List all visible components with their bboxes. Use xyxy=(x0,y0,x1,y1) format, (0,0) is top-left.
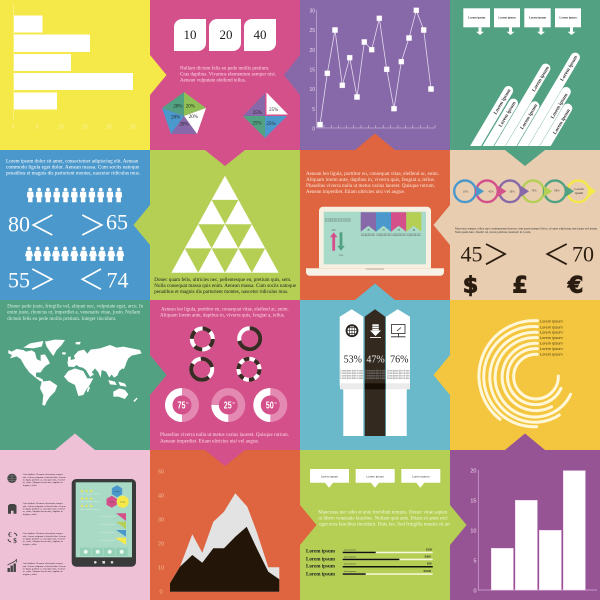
circle labels: 45% xyxy=(488,190,494,193)
circle labels: 70% xyxy=(531,190,537,192)
pyramid xyxy=(171,176,279,273)
screen tabs: 46 xyxy=(367,230,369,232)
screen text lines: Lorem ipsum dolor xyxy=(100,540,115,542)
tab bar xyxy=(80,548,128,556)
small text blocks: Lorem ipsum dolor sit amet xyxy=(366,374,385,378)
pentagon pie: 20% xyxy=(179,123,189,128)
star ratings: ★ xyxy=(89,496,94,501)
arc labels: Lorem ipsum xyxy=(540,352,563,357)
axis labels: 0 xyxy=(12,125,15,131)
row labels: Lorem ipsum xyxy=(306,557,336,562)
circle labels: Lorem xyxy=(574,187,584,191)
caption: dictum felis eu pede mollis pretium. Integer tincidunt. xyxy=(7,317,116,322)
columns xyxy=(491,471,585,590)
axis labels: 25 xyxy=(130,125,136,131)
percent values: 47% xyxy=(366,354,385,365)
row labels: Lorem ipsum xyxy=(306,572,336,577)
screen text lines: Lorem ipsum dolor sit xyxy=(80,501,101,503)
caption xyxy=(154,278,297,295)
arc labels: Lorem ipsum xyxy=(540,335,563,340)
panel: pink donut charts xyxy=(150,300,300,450)
large donut 25: 25 xyxy=(224,401,232,412)
comparison 80 vs 65: 80 xyxy=(8,212,30,237)
pink text block: Aenean vulputate eleifend tellus. xyxy=(180,79,246,84)
y axis labels xyxy=(309,8,315,132)
panel: purple column chart xyxy=(450,450,600,600)
hexagons: Lorem xyxy=(120,501,126,503)
large donut 75: 75 xyxy=(178,401,186,412)
caption: Donec quam felis, ultricies nec, pellentesque eu, pretium quis, sem. xyxy=(154,278,291,283)
circle chain xyxy=(454,180,596,202)
screen tabs: Lorem ipsum dolor sit amet xyxy=(406,235,421,237)
caption xyxy=(7,305,144,322)
arrow: pink down into orange xyxy=(205,450,245,466)
star ratings: ★ xyxy=(85,496,90,501)
side text blocks: ac, enim. Aliquam lorem ante, dapibus in xyxy=(23,570,64,573)
circle labels: 10% xyxy=(463,190,469,193)
side text blocks: nisi. Aenean vulputate eleifend tellus. Aenean xyxy=(23,535,66,538)
panel: cyan arrow columns xyxy=(300,300,450,450)
screen tabs: Lorem ipsum dolor sit amet xyxy=(361,235,375,237)
star ratings: ★ xyxy=(80,504,85,509)
intro text: penatibus et magnis dis parturient montes, nascetur ridiculus mus. xyxy=(6,172,140,177)
callout boxes xyxy=(463,8,581,35)
dark area xyxy=(170,527,279,592)
screen tabs: Lorem ipsum dolor sit amet xyxy=(376,233,391,235)
hexagons: Lorem xyxy=(109,501,115,503)
currency symbols: € xyxy=(567,274,583,298)
axis labels: 5 xyxy=(36,125,39,131)
y axis labels: 5 xyxy=(312,107,315,113)
tile numbers: 10 xyxy=(184,27,196,42)
caption: Aenean leo ligula, porttitor eu, consequat vitae, eleifend ac, enim. xyxy=(306,172,439,177)
y axis labels: 30 xyxy=(158,518,164,524)
progress small labels: Lorem ipsum xyxy=(344,548,356,551)
y axis labels: 0 xyxy=(473,588,476,594)
world map xyxy=(8,340,142,406)
segmented donut two xyxy=(239,328,260,349)
screen text lines: Lorem ipsum dolor sit xyxy=(80,509,101,511)
screen heading: Lorem ipsum dolor sit amet consectetuer xyxy=(325,220,351,222)
arrow: yellow to pink xyxy=(150,55,166,95)
y axis labels: 20 xyxy=(158,542,164,548)
pink text block: Nullam dictum felis eu pede mollis pretium. xyxy=(180,67,269,72)
diamond pie: 25% xyxy=(252,122,262,127)
pentagon pie: 20% xyxy=(189,115,198,120)
progress bars xyxy=(343,552,433,575)
y axis labels: 15 xyxy=(470,498,476,504)
circle labels: 30% xyxy=(509,190,515,193)
caption xyxy=(306,172,439,195)
screen text lines: Lorem ipsum dolor xyxy=(100,532,115,534)
icon: growth chart xyxy=(8,560,17,572)
caption: penatibus et magnis dis parturient montes, nascetur ridiculus mus. xyxy=(154,290,288,295)
star ratings: ★ xyxy=(80,496,85,501)
currency symbols: $ xyxy=(463,274,478,298)
pentagon pie: 20% xyxy=(171,116,180,121)
diagonal bars xyxy=(472,57,575,152)
progress small labels: Lorem ipsum xyxy=(344,563,356,566)
y axis labels: 10 xyxy=(309,87,315,93)
axis labels xyxy=(12,125,136,131)
diamond pie: 25% xyxy=(253,111,262,116)
bubble labels xyxy=(321,474,430,478)
pink text block xyxy=(180,67,276,84)
percent values: 53% xyxy=(344,354,362,365)
callout labels xyxy=(468,16,577,20)
bottom caption: Aenean imperdiet. Etiam ultricies nisi vel augue. xyxy=(160,439,259,444)
bar labels: Lorem ipsum xyxy=(494,88,513,116)
row labels: Lorem ipsum xyxy=(306,549,336,554)
circle labels: 80% xyxy=(554,190,560,192)
screen tabs: Lorem ipsum dolor sit amet xyxy=(376,235,391,237)
arc labels: Lorem ipsum xyxy=(540,319,563,324)
people row one xyxy=(27,188,122,202)
large donut 25 xyxy=(211,388,245,422)
y axis labels: 0 xyxy=(159,590,163,596)
side text blocks: feugiat a, tellus xyxy=(23,573,37,576)
y axis labels: 25 xyxy=(309,28,315,34)
pentagon pie xyxy=(162,92,206,134)
screen tabs: Lorem ipsum dolor sit amet xyxy=(392,233,406,235)
side text blocks: Cras dapibus. Vivamus elementum semper xyxy=(23,473,63,476)
comparison 80 vs 65: 65 xyxy=(106,209,128,234)
arc labels: Lorem ipsum xyxy=(540,341,563,346)
small text blocks: Lorem ipsum dolor sit amet xyxy=(387,377,410,380)
side text blocks: nisi. Aenean vulputate eleifend tellus. Aenean xyxy=(23,505,66,508)
axis labels: 20 xyxy=(106,125,112,131)
screen text lines: Lorem ipsum dolor xyxy=(100,524,115,526)
side text blocks: Cras dapibus. Vivamus elementum semper xyxy=(23,562,63,565)
arrow: purple to pink xyxy=(284,55,300,95)
up and down arrows xyxy=(330,228,345,257)
row labels: Lorem ipsum xyxy=(306,564,336,569)
comparison 55 vs 74 xyxy=(8,267,128,292)
star ratings xyxy=(80,488,94,509)
arrow: purple up xyxy=(505,434,545,450)
people row two xyxy=(25,247,124,261)
callout labels: Lorem ipsum xyxy=(498,16,516,20)
star ratings: ★ xyxy=(80,488,85,493)
arrow: orange up xyxy=(355,134,395,150)
screen tabs: 50 xyxy=(398,230,400,232)
bubble labels: Lorem ipsum xyxy=(321,474,339,478)
grey area xyxy=(170,493,279,592)
segmented donut one xyxy=(192,328,213,350)
pentagon pie: 20% xyxy=(186,105,195,110)
large donut 50 xyxy=(253,388,287,422)
small text blocks: Lorem ipsum dolor sit amet xyxy=(366,372,385,375)
side text blocks xyxy=(23,473,66,576)
currency symbols: £ xyxy=(512,274,528,298)
arrow: cyan up xyxy=(355,284,395,300)
white column right xyxy=(386,309,410,436)
small text blocks: Lorem ipsum dolor sit amet xyxy=(387,372,410,375)
small text xyxy=(455,228,598,234)
bar labels: Lorem ipsum xyxy=(551,92,570,120)
bottom caption xyxy=(160,433,289,444)
icon: globe xyxy=(346,325,358,336)
side text blocks: leo ligula, porttitor eu, consequat vitae, eleifend xyxy=(23,538,65,540)
panel: purple line chart xyxy=(300,0,450,150)
screen tabs xyxy=(361,212,421,237)
progress small labels: $5430 xyxy=(424,569,432,573)
bottom caption: Phasellus viverra nulla ut metus varius laoreet. Quisque rutrum. xyxy=(160,433,289,438)
side text blocks: leo ligula, porttitor eu, consequat vitae, eleifend xyxy=(23,508,65,510)
intro text xyxy=(6,160,140,177)
bar labels: Lorem ipsum xyxy=(499,100,518,128)
side text blocks: leo ligula, porttitor eu, consequat vitae, eleifend xyxy=(23,568,65,570)
screen heading: Lorem ipsum dolor sit amet consectetuer xyxy=(325,219,351,221)
pink text block: Cras dapibus. Vivamus elementum semper nisi. xyxy=(180,73,276,78)
small text: Maecenas tempus, tellus eget condimentum rhoncus, sem quam semper libero, sit amet adipiscing sem neque sed ipsum. xyxy=(455,228,598,230)
large donut 75: % xyxy=(186,401,189,405)
screen text lines xyxy=(80,494,115,542)
circle labels xyxy=(463,187,584,195)
side text blocks: ac, enim. Aliquam lorem ante, dapibus in xyxy=(23,510,64,513)
bubble labels: Lorem ipsum xyxy=(412,474,430,478)
icon: money exchange xyxy=(8,531,17,545)
progress small labels: Lorem ipsum xyxy=(344,570,356,573)
arrow: lime to purple xyxy=(450,505,466,545)
icon: globe xyxy=(7,474,17,483)
intro text: Lorem ipsum dolor sit amet, consectetuer adipiscing elit. Aenean xyxy=(6,160,139,165)
arc labels: Lorem ipsum xyxy=(540,330,563,335)
comparison 55 vs 74: 55 xyxy=(8,267,30,292)
caption: ut libero venenatis faucibus. Nullam quis ante. Etiam sit amet orci xyxy=(318,516,448,521)
white column left xyxy=(340,309,363,436)
tile numbers: 40 xyxy=(254,27,266,42)
y axis labels: 10 xyxy=(158,566,164,572)
screen heading xyxy=(325,219,351,222)
progress small labels: Lorem ipsum xyxy=(344,555,356,558)
panel: light pink tablet xyxy=(0,450,150,600)
colored tags xyxy=(115,513,126,545)
caption: Phasellus viverra nulla ut metus varius laoreet. Quisque rutrum. xyxy=(306,184,435,189)
arrow: light pink up xyxy=(55,434,95,450)
panel: teal world map xyxy=(0,300,150,450)
caption: Donec pede justo, fringilla vel, aliquet nec, vulputate eget, arcu. In xyxy=(7,305,144,310)
diamond pie xyxy=(243,92,288,138)
top caption: Aliquam lorem ante, dapibus in, viverra quis, feugiat a, tellus. xyxy=(160,313,285,318)
icon: monitor xyxy=(391,324,406,337)
top caption: Aenean leo ligula, porttitor eu, consequat vitae, eleifend ac, enim. xyxy=(161,307,289,312)
hexagons: Lorem xyxy=(115,491,120,493)
caption xyxy=(318,510,456,528)
comparison 55 vs 74: 74 xyxy=(106,267,128,292)
small text blocks: Lorem ipsum dolor sit amet xyxy=(387,370,410,372)
caption: Aenean imperdiet. Etiam ultricies nisi vel augue. xyxy=(306,190,405,195)
arcs xyxy=(479,321,571,427)
up and down arrows: 44% xyxy=(332,228,336,231)
intro text: commodo ligula eget dolor. Aenean massa. Cum sociis natoque xyxy=(6,166,140,171)
small text blocks: Lorem ipsum dolor sit amet xyxy=(366,370,385,372)
icon: money exchange: € xyxy=(8,531,12,539)
arrow: orange to lime xyxy=(300,505,316,545)
percent values xyxy=(344,354,408,365)
side text blocks: ac, enim. Aliquam lorem ante, dapibus in xyxy=(23,481,64,484)
segmented donut three xyxy=(190,358,213,381)
progress small labels: $250 xyxy=(426,547,432,551)
number tiles xyxy=(174,19,276,51)
arc labels: Lorem ipsum xyxy=(540,346,563,351)
y axis labels: 15 xyxy=(309,68,315,74)
caption: eget eros faucibus tincidunt. Duis leo. Sed fringilla mauris sit amet. xyxy=(319,523,456,528)
progress small labels: $360 xyxy=(424,554,431,558)
screen tabs: Lorem ipsum dolor sit amet xyxy=(361,233,375,235)
small text blocks xyxy=(340,370,410,380)
comparison 45 vs 70 xyxy=(460,242,594,267)
progress small labels: $50 xyxy=(427,562,432,566)
pentagon pie: 20% xyxy=(173,105,183,110)
bar labels: Lorem ipsum xyxy=(532,65,551,93)
tablet buttons xyxy=(94,561,113,564)
speech bubbles xyxy=(310,469,440,488)
large donut 25: % xyxy=(232,401,235,405)
y axis labels: 0 xyxy=(312,126,315,132)
small text blocks: Lorem ipsum dolor sit amet xyxy=(387,374,410,378)
small text blocks: Lorem ipsum dolor sit amet xyxy=(340,377,363,380)
row labels xyxy=(306,549,336,577)
panel: orange area chart xyxy=(150,450,300,600)
panel: pink numbers and pies xyxy=(150,0,300,150)
screen tabs: Lorem ipsum dolor sit amet xyxy=(392,235,406,237)
comparison 45 vs 70: 45 xyxy=(460,242,482,267)
circle labels: ipsum xyxy=(575,191,584,195)
small text blocks: Lorem ipsum dolor sit amet xyxy=(340,370,363,372)
icon: money exchange: $ xyxy=(13,537,17,545)
top caption xyxy=(160,307,289,318)
panel: beige circles and currency xyxy=(450,150,600,300)
y axis labels xyxy=(158,470,164,596)
small text blocks: Lorem ipsum dolor sit amet xyxy=(340,374,363,378)
arrow: amber to cyan xyxy=(434,355,450,395)
y axis labels: 30 xyxy=(309,8,315,14)
caption: Maecenas nec odio et ante tincidunt tempus. Donec vitae sapien xyxy=(318,510,448,515)
star ratings: ★ xyxy=(89,488,94,493)
side text blocks: ac, enim. Aliquam lorem ante, dapibus in xyxy=(23,540,64,543)
screen text lines: Lorem ipsum dolor xyxy=(100,516,115,518)
y axis labels: 10 xyxy=(470,528,476,534)
arc labels: Lorem ipsum xyxy=(540,324,563,329)
side text blocks: feugiat a, tellus xyxy=(23,484,37,487)
side text blocks: leo ligula, porttitor eu, consequat vitae, eleifend xyxy=(23,478,65,482)
star ratings: ★ xyxy=(85,504,90,509)
bubble labels: Lorem ipsum xyxy=(367,474,384,478)
callout labels: Lorem ipsum xyxy=(468,16,486,20)
arrow: beige to orange xyxy=(434,205,450,245)
axis labels: 15 xyxy=(82,125,88,131)
panel: orange laptop xyxy=(300,150,450,300)
caption: Nulla consequat massa quis enim. Aenean massa. Cum sociis natoque xyxy=(154,284,297,289)
bar labels: Lorem ipsum xyxy=(553,108,572,136)
star ratings: ★ xyxy=(85,488,90,493)
bar labels xyxy=(494,54,580,136)
large donut 50: % xyxy=(274,401,277,405)
side text blocks: Cras dapibus. Vivamus elementum semper xyxy=(23,532,63,535)
icon: building xyxy=(8,504,16,514)
y axis labels: 20 xyxy=(309,48,315,54)
screen text lines: Lorem ipsum dolor sit xyxy=(80,494,101,496)
caption: Aliquam lorem ante, dapibus in, viverra quis, feugiat a, tellus. xyxy=(306,178,435,183)
horizontal bars xyxy=(14,16,133,110)
y axis labels: 5 xyxy=(473,558,476,564)
up and down arrows: 75% xyxy=(339,254,343,257)
dark column xyxy=(365,309,385,436)
laptop xyxy=(306,207,444,276)
side text blocks: nisi. Aenean vulputate eleifend tellus. Aenean xyxy=(23,476,66,479)
bar labels: Lorem ipsum xyxy=(560,54,580,82)
side text blocks: Cras dapibus. Vivamus elementum semper xyxy=(23,502,63,505)
icon: download xyxy=(370,324,381,338)
side text blocks: feugiat a, tellus xyxy=(23,543,37,546)
hexagons xyxy=(106,485,129,508)
caption: enim justo, rhoncus ut, imperdiet a, venenatis vitae, justo. Nullam xyxy=(7,311,140,316)
tile numbers xyxy=(184,27,266,42)
data markers xyxy=(317,8,434,127)
small text blocks: Lorem ipsum dolor sit amet xyxy=(366,377,385,380)
callout labels: Lorem ipsum xyxy=(559,16,577,20)
shaded bands xyxy=(340,383,410,389)
panel: lime triangle pyramid xyxy=(150,150,300,300)
progress small labels xyxy=(344,547,432,573)
large donut 50: 50 xyxy=(266,401,274,412)
axis labels: 10 xyxy=(58,125,64,131)
large donut 75 xyxy=(165,388,199,422)
small text blocks: Lorem ipsum dolor sit amet xyxy=(340,372,363,375)
small text: Nam quam nunc, blandit vel, luctus pulvinar, hendrerit id, lorem. xyxy=(455,231,531,234)
side text blocks: feugiat a, tellus xyxy=(23,513,37,516)
currency symbols xyxy=(463,274,583,298)
diamond pie: 25% xyxy=(266,122,276,127)
tablet xyxy=(72,479,136,567)
segmented donut four xyxy=(238,359,260,380)
screen tabs: 44 xyxy=(413,230,415,232)
y axis labels: 20 xyxy=(470,468,476,474)
data line xyxy=(320,10,431,125)
diamond pie: 25% xyxy=(269,108,278,113)
arc labels xyxy=(540,319,563,357)
arrow: teal down xyxy=(505,150,545,166)
tile numbers: 20 xyxy=(220,27,232,42)
y axis labels xyxy=(470,468,476,594)
y axis labels: 50 xyxy=(158,470,164,476)
screen tabs: Lorem ipsum dolor sit amet xyxy=(406,233,421,235)
panel: yellow bar chart xyxy=(0,0,150,150)
percent values: 76% xyxy=(390,354,408,365)
comparison 80 vs 65 xyxy=(8,209,128,237)
panel: lime callouts and progress bars xyxy=(300,450,456,600)
panel: blue population comparison xyxy=(0,150,150,300)
panel: teal labels and diagonal bars xyxy=(450,0,600,152)
arrow: lime to blue xyxy=(134,205,150,245)
side text blocks: nisi. Aenean vulputate eleifend tellus. Aenean xyxy=(23,565,66,568)
callout labels: Lorem ipsum xyxy=(529,16,547,20)
arrow: pink down xyxy=(205,150,245,166)
star ratings: ★ xyxy=(89,504,94,509)
screen tabs: 71 xyxy=(382,230,384,232)
bar labels: Lorem ipsum xyxy=(520,103,540,131)
y axis labels: 40 xyxy=(158,494,164,500)
comparison 45 vs 70: 70 xyxy=(572,242,594,267)
panel: amber concentric arcs xyxy=(450,300,600,450)
arrow: teal to pink xyxy=(150,355,166,395)
